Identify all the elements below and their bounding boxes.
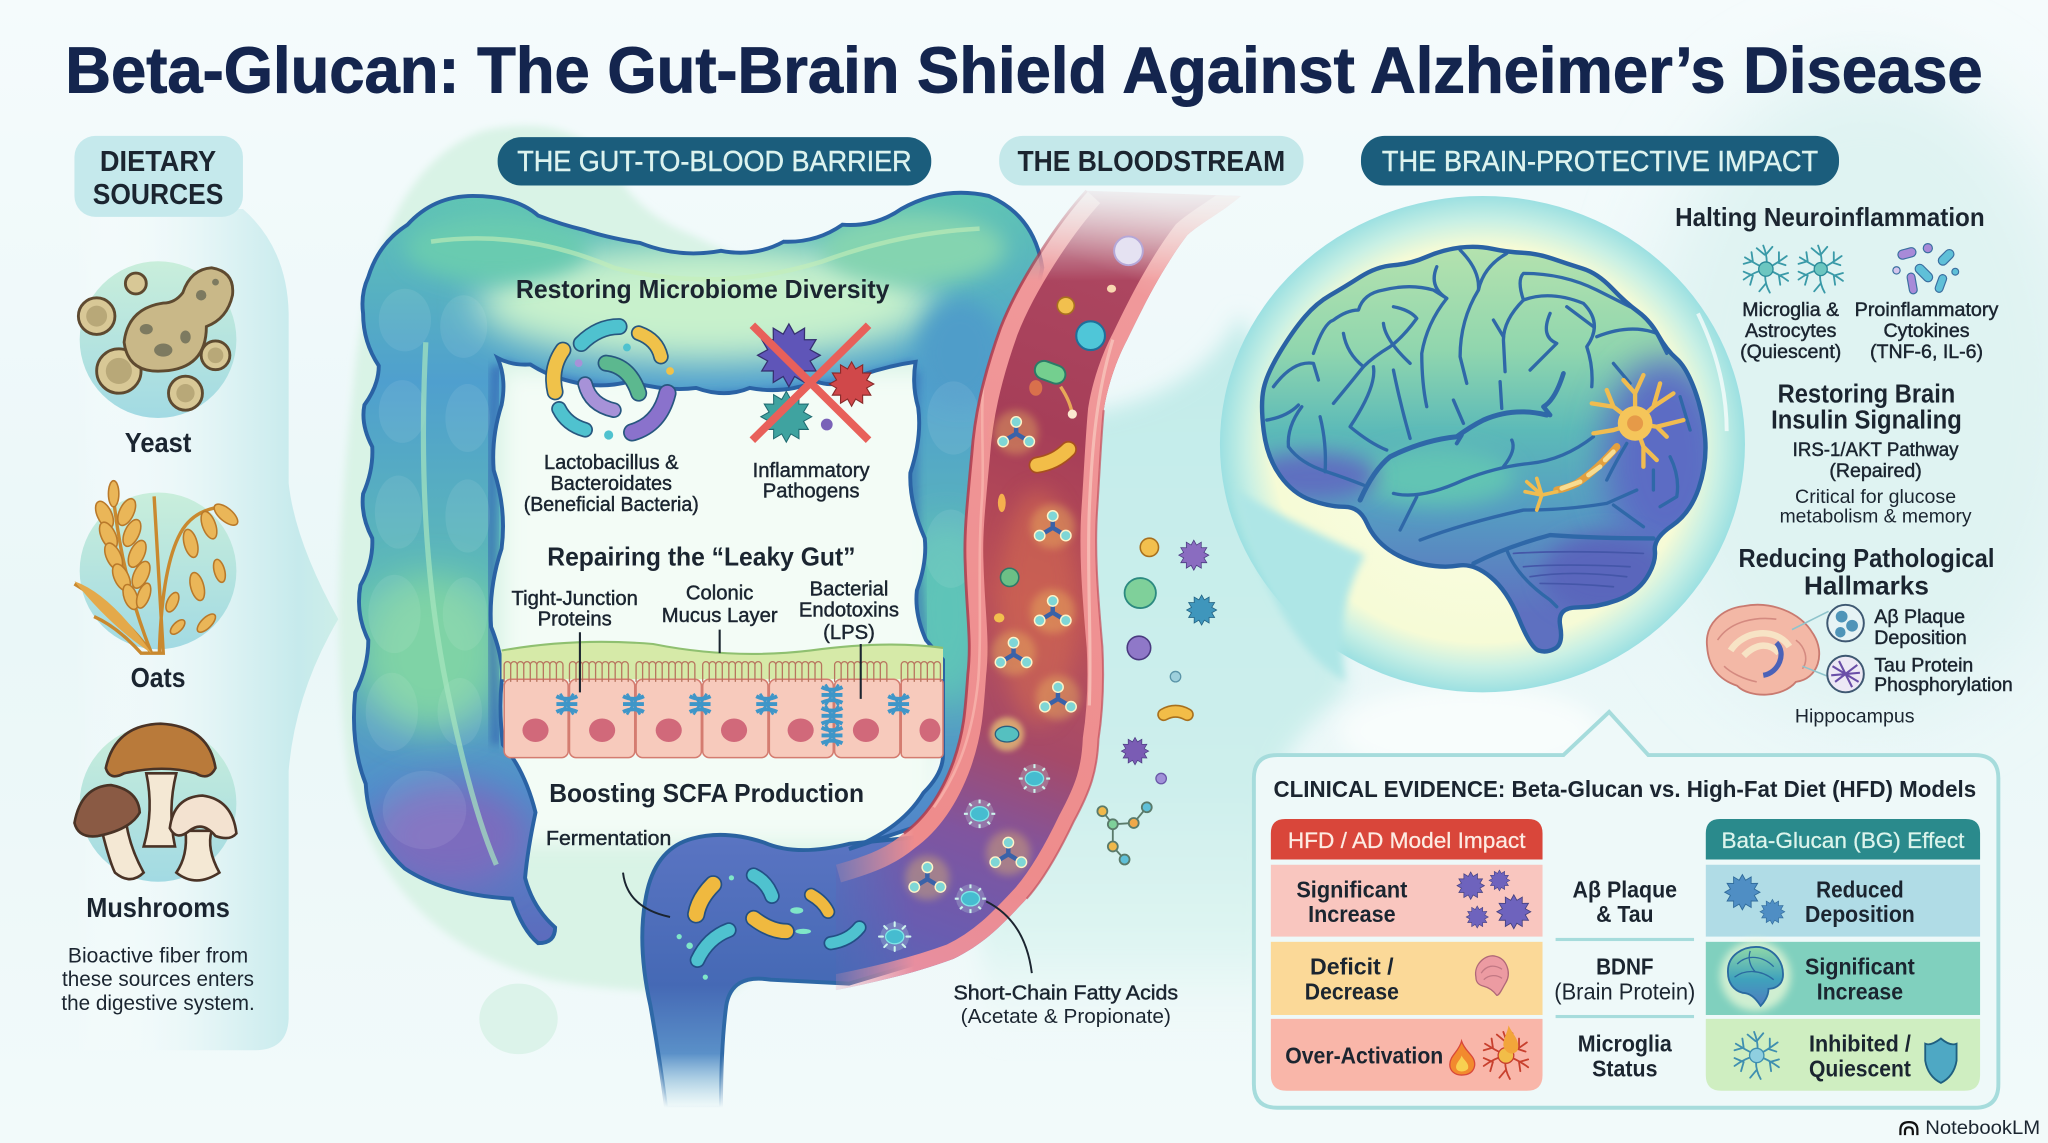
heading: reducing pathological hallmarks: Hallmarks: [1804, 570, 1929, 600]
row: inhibited / quiescent: Inhibited /: [1809, 1031, 1911, 1057]
panel: clinical evidence table: [1254, 712, 1998, 1108]
row: inhibited / quiescent: Quiescent: [1809, 1055, 1911, 1081]
column: measured markers: (Brain Protein): [1554, 978, 1695, 1004]
background blob: brain region wash: [967, 65, 2048, 1071]
heading pill: the brain-protective impact: [1361, 136, 1839, 185]
background blob: mint wash behind the colon: [339, 126, 1019, 993]
column: measured markers: & Tau: [1596, 901, 1654, 927]
row: over-activation: [1271, 1019, 1543, 1091]
label: short-chain fatty acids: (Acetate & Propionate): [961, 1006, 1171, 1028]
label: plaque and tau: [1874, 606, 2013, 696]
text: bioactive fiber note: Bioactive fiber from: [68, 945, 248, 968]
label: microglia and astrocytes: [1740, 299, 1841, 363]
row: inhibited / quiescent: [1706, 1019, 1980, 1091]
molecules and particles in the bloodstream: [905, 236, 1143, 913]
label: inflammatory pathogens: Inflammatory: [753, 460, 870, 482]
text: bioactive fiber note: the digestive system.: [61, 992, 255, 1015]
icon: proinflammatory cytokines: [1893, 244, 1959, 294]
heading: restoring microbiome diversity: Restoring Microbiome Diversity: [516, 274, 890, 304]
label: plaque and tau: Tau Protein: [1874, 654, 1973, 676]
column: hfd / ad model impact: [1271, 819, 1543, 1091]
labels: barrier components: Tight-Junction: [512, 588, 638, 610]
icon: quiescent microglia: [1735, 1032, 1779, 1079]
brain bubble: [1220, 196, 1745, 692]
heading pill: the gut-to-blood barrier: [498, 137, 931, 185]
column: measured markers: Aβ Plaque: [1573, 876, 1677, 902]
label: proinflammatory cytokines: Cytokines: [1884, 320, 1970, 342]
column header: beta-glucan: [1706, 819, 1980, 860]
text: pathway note: IRS-1/AKT Pathway: [1793, 439, 1959, 461]
label: microglia and astrocytes: Microglia &: [1742, 299, 1839, 321]
icon: reduced plaques: [1725, 875, 1785, 924]
heading pill: the bloodstream: [999, 136, 1304, 185]
column header: beta-glucan: Bata-Glucan (BG) Effect: [1721, 828, 1964, 853]
label: plaque and tau: Aβ Plaque: [1874, 606, 1965, 628]
label: inflammatory pathogens: Pathogens: [763, 481, 859, 503]
heading: restoring brain insulin signaling: [1771, 380, 1962, 434]
label: microglia and astrocytes: (Quiescent): [1740, 341, 1841, 363]
labels: barrier components: Proteins: [538, 609, 612, 631]
heading pill: the brain-protective impact: THE BRAIN-PROTECTIVE IMPACT: [1382, 146, 1818, 178]
label: short-chain fatty acids: Short-Chain Fatty Acids: [953, 982, 1178, 1004]
inner colon light area: [504, 372, 935, 843]
heading: boosting scfa production: Boosting SCFA Production: [549, 778, 864, 808]
column: measured markers: Microglia: [1578, 1031, 1673, 1057]
label: beneficial bacteria: (Beneficial Bacteria): [524, 494, 699, 516]
text: bioactive fiber note: [61, 945, 255, 1015]
row: significant increase: [1271, 865, 1543, 937]
icon: microglia and astrocytes: [1744, 246, 1843, 293]
label: inflammatory pathogens: [753, 460, 870, 503]
column header: hfd: HFD / AD Model Impact: [1288, 828, 1526, 853]
row: significant increase: Significant: [1805, 953, 1915, 979]
row: significant increase: [1706, 941, 1980, 1015]
label: hippocampus: Hippocampus: [1795, 705, 1915, 727]
row: significant increase: Increase: [1817, 978, 1903, 1004]
panel: dietary sources: [61, 136, 338, 1050]
column: beta-glucan effect: [1706, 819, 1980, 1091]
labels: barrier components: (LPS): [823, 622, 875, 644]
label: microglia and astrocytes: Astrocytes: [1745, 320, 1837, 342]
text: pathway note: metabolism & memory: [1780, 506, 1972, 528]
heading: halting neuroinflammation: Halting Neuroinflammation: [1675, 202, 1985, 232]
label: proinflammatory cytokines: [1855, 299, 1999, 363]
heading pill: the bloodstream: THE BLOODSTREAM: [1017, 146, 1285, 178]
icon: beneficial bacteria: [554, 327, 674, 440]
text: pathway note: [1780, 439, 1972, 528]
panel: halting neuroinflammation: [1675, 202, 1999, 363]
sigmoid bacteria and fermentation: [677, 875, 910, 980]
label: beneficial bacteria: Lactobacillus &: [544, 452, 679, 474]
icon: hippocampus cross-section: [1707, 605, 1864, 695]
background blob: small mint oval: [479, 984, 558, 1054]
label: yeast: Yeast: [125, 427, 191, 458]
icon: yeast: [78, 261, 236, 418]
heading: reducing pathological hallmarks: [1738, 543, 1994, 600]
label: fermentation: Fermentation: [546, 828, 671, 850]
text: pathway note: Critical for glucose: [1795, 486, 1956, 508]
label: plaque and tau: Deposition: [1874, 627, 1967, 649]
heading: reducing pathological hallmarks: Reducing Pathological: [1738, 543, 1994, 573]
icon: mushrooms: [74, 724, 236, 882]
row: reduced deposition: Deposition: [1805, 901, 1915, 927]
heading pill: dietary sources: DIETARY: [100, 146, 216, 178]
label: proinflammatory cytokines: Proinflammatory: [1855, 299, 1999, 321]
table frame with pointer: [1254, 712, 1998, 1108]
icon: oats and wheat: [74, 481, 241, 653]
illustration: brain: [1247, 247, 1728, 651]
icon: shield: [1925, 1038, 1957, 1083]
epithelium barrier diagram: [502, 630, 943, 758]
icon: flame and activated microglia: [1450, 1025, 1528, 1079]
row: deficit / decrease: Decrease: [1305, 978, 1399, 1004]
icon: glowing healthy brain: [1720, 941, 1791, 1011]
icon: golden neuron: [1525, 375, 1683, 510]
column: measured markers: [1554, 876, 1695, 1081]
heading: restoring brain insulin signaling: Insulin Signaling: [1771, 406, 1962, 434]
panel: restoring brain insulin signaling: [1771, 380, 1972, 528]
label: oats: Oats: [131, 662, 185, 693]
icon: small pink brain: [1476, 956, 1508, 995]
label: short-chain fatty acids: [953, 982, 1178, 1028]
row: significant increase: Increase: [1308, 901, 1396, 927]
column header: hfd: [1271, 819, 1543, 860]
row: deficit / decrease: [1271, 942, 1543, 1015]
labels: barrier components: Endotoxins: [799, 600, 899, 622]
icon: plaques: [1457, 870, 1531, 929]
sigmoid colon tube: [642, 835, 927, 1108]
column: measured markers: BDNF: [1596, 953, 1654, 979]
label: proinflammatory cytokines: (TNF-6, IL-6): [1870, 341, 1983, 363]
row: deficit / decrease: Deficit /: [1310, 953, 1394, 979]
labels: barrier components: Colonic: [686, 583, 753, 605]
bloodstream vessel: [836, 191, 1241, 990]
labels: barrier components: Bacterial: [810, 579, 888, 601]
heading pill: the gut-to-blood barrier: THE GUT-TO-BLOOD BARRIER: [517, 146, 912, 178]
row: reduced deposition: [1706, 865, 1980, 937]
row: significant increase: Significant: [1296, 876, 1407, 902]
heading: repairing the leaky gut: Repairing the “Leaky Gut”: [547, 542, 856, 572]
heading: restoring brain insulin signaling: Restoring Brain: [1778, 380, 1955, 408]
text: bioactive fiber note: these sources enters: [62, 968, 254, 991]
label: mushrooms: Mushrooms: [86, 892, 230, 923]
row: over-activation: Over-Activation: [1285, 1042, 1443, 1068]
title: Beta-Glucan: The Gut-Brain Shield Against Alzheimer’s Disease: [65, 34, 1983, 107]
brand: notebooklm: NotebookLM: [1925, 1117, 2040, 1139]
colon: [354, 193, 1042, 943]
labels: barrier components: Mucus Layer: [662, 605, 778, 627]
row: reduced deposition: Reduced: [1816, 876, 1904, 902]
heading pill: dietary sources: [74, 136, 243, 217]
particles crossing out of the bloodstream: [1097, 538, 1217, 864]
text: pathway note: (Repaired): [1829, 460, 1922, 482]
column: measured markers: Status: [1592, 1055, 1657, 1081]
label: plaque and tau: Phosphorylation: [1874, 674, 2013, 696]
label: beneficial bacteria: [524, 452, 699, 516]
panel background with pointer: [74, 209, 338, 1050]
icon: inflammatory pathogens crossed out: [752, 324, 874, 442]
callout line: short-chain fatty acids: [986, 901, 1032, 973]
labels: barrier components: [512, 579, 899, 644]
panel: reducing pathological hallmarks: [1707, 543, 2013, 727]
label: beneficial bacteria: Bacteroidates: [551, 473, 672, 495]
heading pill: dietary sources: SOURCES: [93, 179, 223, 211]
callout line: fermentation: [623, 873, 670, 917]
heading: clinical evidence: CLINICAL EVIDENCE: Beta-Glucan vs. High-Fat Diet (HFD) Models: [1273, 776, 1976, 802]
